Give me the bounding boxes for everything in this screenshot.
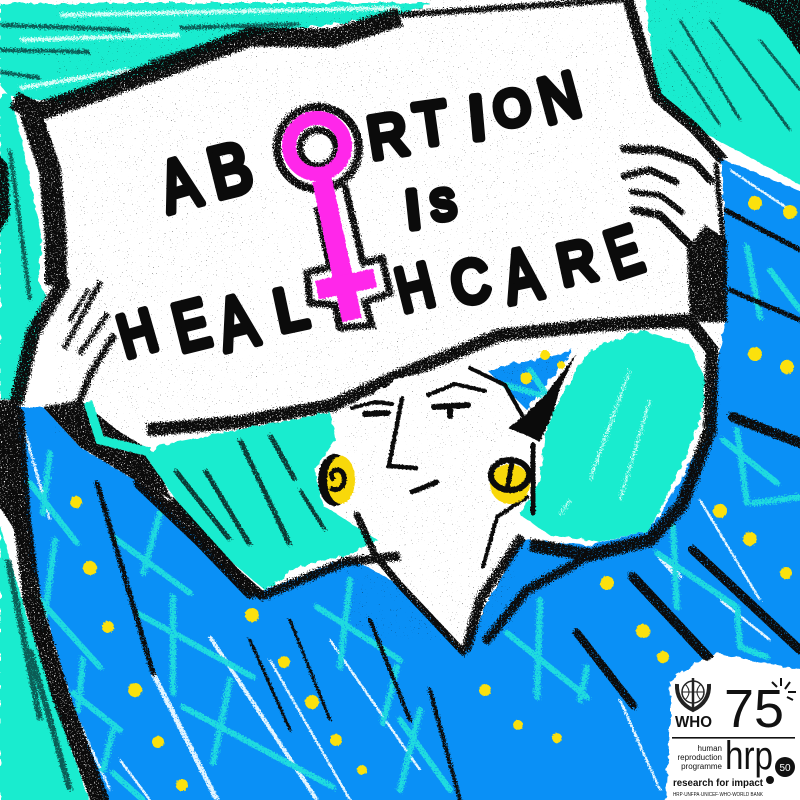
word: RTION: O [489,78,535,139]
programme name: human [698,744,722,753]
hand: left [15,283,250,800]
word: HEAL [111,274,313,371]
shirt hatching [30,247,800,800]
word: AB: B [200,127,260,215]
logo: WHO emblem [675,678,712,731]
logo: hrp: reproduction [678,753,722,762]
paper speckle [55,0,722,433]
blue shirt [17,157,800,800]
black corner and edge masses [0,0,800,540]
word: HCARE: R [552,227,602,298]
word: HEAL: A [209,277,265,367]
word: HCARE: C [446,245,495,318]
face speckle [345,375,515,640]
hair strands: black [470,353,577,567]
word: IS: S [427,181,459,230]
hrp letters: hrp [725,734,773,778]
yellow dots [70,196,797,791]
hair: left, teal with hatching [88,402,400,596]
word: HCARE: A [496,231,548,319]
neck and face [315,366,530,652]
hair highlights [560,370,650,515]
word: RTION: R [363,100,413,172]
word: RTION: I [466,83,489,154]
50 badge [775,757,795,777]
face features [352,384,485,492]
word: IS [403,179,459,241]
sign outline [14,0,723,430]
word: HEAL: H [111,296,164,371]
emblem [677,678,709,710]
word: HEAL: E [165,284,217,366]
word: HCARE [389,210,651,325]
word: AB: A [150,140,208,228]
symbol magenta fill [289,118,375,320]
word: HEAL: L [268,274,313,345]
word: HCARE: H [389,249,441,325]
hair outline [530,322,712,555]
hand: right [624,149,727,322]
hair lower outline [170,500,400,596]
female symbol [277,107,390,328]
hair hatching [175,435,325,545]
logo: hrp: programme [681,762,723,771]
word: IS: I [403,179,424,241]
hair: right, teal blob [520,322,712,555]
logo: 75: 75 [724,679,784,739]
word: HCARE: E [596,210,651,293]
spark rays [772,678,796,700]
partners: HRP·UNFPA·UNICEF·WHO·WORLD BANK [673,792,764,798]
logo divider [672,737,795,739]
collar [357,515,587,652]
WHO: WHO [675,714,712,731]
word: RTION: T [410,89,452,160]
headline lettering [111,57,651,371]
earring: right [490,460,530,504]
logo: hrp: 50 [779,763,791,774]
tagline: research for impact [673,778,764,789]
sign board [14,0,725,433]
logo background [670,655,800,800]
symbol outline [277,107,390,328]
shirt chalk white streaks [20,170,790,800]
word: RTION: N [531,57,587,138]
word: RTION [363,57,587,172]
earring: left [318,454,355,506]
shirt black strokes [97,210,800,800]
logo: hrp [673,734,795,798]
word: AB [150,127,260,228]
